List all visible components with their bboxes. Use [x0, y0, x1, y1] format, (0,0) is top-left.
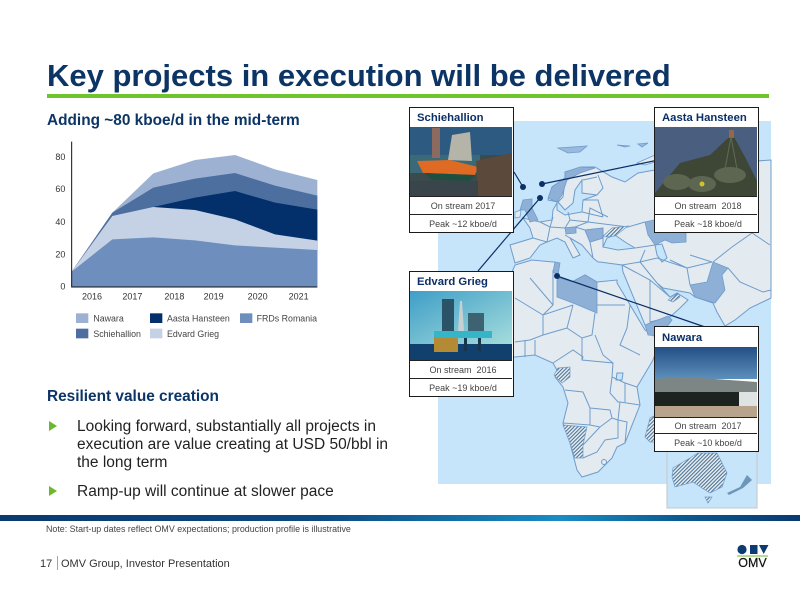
- seas and lakes: [602, 235, 667, 464]
- project card: Aasta Hansteen: [654, 107, 759, 233]
- divider: [655, 214, 757, 215]
- bullet text 1: Looking forward, substantially all projects in: [77, 418, 376, 435]
- Tasmania: [705, 497, 712, 503]
- card heading: Aasta Hansteen: [662, 112, 747, 124]
- y axis labels: 0: [60, 282, 65, 292]
- divider: [410, 214, 512, 215]
- divider: [410, 378, 512, 379]
- bullet icon 1: [49, 421, 57, 431]
- legend: FRDs Romania: [257, 314, 317, 324]
- divider: [410, 196, 512, 197]
- stacked area chart: [55, 142, 318, 339]
- heading: resilient value creation: Resilient value creation: [47, 388, 219, 405]
- bullet text 1: execution are value creating at USD 50/bbl in: [77, 436, 388, 453]
- legend: Edvard Grieg: [167, 329, 219, 339]
- area: Schiehallion: [72, 173, 317, 287]
- Australia: [672, 453, 727, 493]
- connector lines and location markers: [478, 160, 705, 327]
- card heading: Schiehallion: [417, 112, 484, 124]
- card heading: Edvard Grieg: [417, 276, 488, 288]
- x axis labels: [82, 291, 309, 301]
- bullet text 1: the long term: [77, 454, 167, 471]
- footer band: [0, 515, 800, 521]
- partner countries: shaded: [520, 167, 728, 336]
- photo: orange vessel: [410, 127, 512, 196]
- card heading: Nawara: [662, 332, 702, 344]
- islands: [515, 143, 655, 218]
- landmass: Eurasia: [510, 160, 771, 327]
- bullet text 2: Ramp-up will continue at slower pace: [77, 483, 334, 500]
- x axis labels: 2021: [289, 291, 309, 301]
- area: Aasta Hansteen: [153, 191, 317, 287]
- x axis labels: 2016: [82, 291, 102, 301]
- y axis labels: 20: [55, 250, 65, 260]
- project card: Schiehallion: [409, 107, 514, 233]
- x axis labels: 2020: [248, 291, 268, 301]
- footnote: Note: Start-up dates reflect OMV expectations; production profile is illustrative: [46, 524, 351, 534]
- photo: offshore rig: [410, 291, 512, 360]
- legend: Aasta Hansteen: [167, 314, 230, 324]
- peak production: Peak ~12 kboe/d: [429, 219, 497, 229]
- divider: [655, 433, 757, 434]
- y axis labels: [55, 152, 65, 292]
- photo: subsea field: [655, 127, 757, 196]
- bullet list: [49, 418, 388, 500]
- world map: [438, 121, 772, 509]
- title underline: [47, 94, 769, 98]
- legend: [76, 313, 317, 339]
- divider: [410, 360, 512, 361]
- hatched territories: [554, 226, 680, 458]
- project card: Edvard Grieg: [409, 271, 514, 397]
- on stream date: On stream 2017: [431, 201, 495, 211]
- peak production: Peak ~19 kboe/d: [429, 383, 497, 393]
- photo: desert pipeline: [655, 347, 757, 417]
- inset: Australia and New Zealand: [667, 440, 757, 508]
- area: FRDs Romania: [72, 237, 317, 287]
- New Zealand: [727, 475, 752, 495]
- legend: Nawara: [93, 314, 124, 324]
- bullet text 1: [77, 418, 388, 471]
- project card: Nawara: [654, 326, 759, 452]
- y axis labels: 60: [55, 184, 65, 194]
- y axis labels: 40: [55, 217, 65, 227]
- y axis labels: 80: [55, 152, 65, 162]
- country borders: [515, 175, 771, 458]
- heading: adding volume: Adding ~80 kboe/d in the mid-term: [47, 112, 300, 129]
- landmass: Africa: [500, 260, 660, 477]
- OMV logo: [737, 544, 768, 569]
- footer divider: [57, 556, 58, 570]
- peak production: Peak ~18 kboe/d: [674, 219, 742, 229]
- footer text: OMV Group, Investor Presentation: [61, 558, 230, 570]
- on stream date: On stream 2016: [429, 365, 497, 375]
- x axis labels: 2019: [204, 291, 224, 301]
- title: Key projects in execution will be delivered: [47, 58, 671, 93]
- legend: Schiehallion: [93, 329, 141, 339]
- divider: [655, 417, 757, 418]
- x axis labels: 2017: [122, 291, 142, 301]
- bullet icon 2: [49, 486, 57, 496]
- area: Edvard Grieg: [72, 207, 317, 287]
- page number: 17: [40, 558, 52, 570]
- x axis labels: 2018: [164, 291, 184, 301]
- peak production: Peak ~10 kboe/d: [674, 438, 742, 448]
- on stream date: On stream 2018: [674, 201, 742, 211]
- divider: [655, 196, 757, 197]
- on stream date: On stream 2017: [674, 421, 742, 431]
- area: Nawara: [72, 155, 317, 287]
